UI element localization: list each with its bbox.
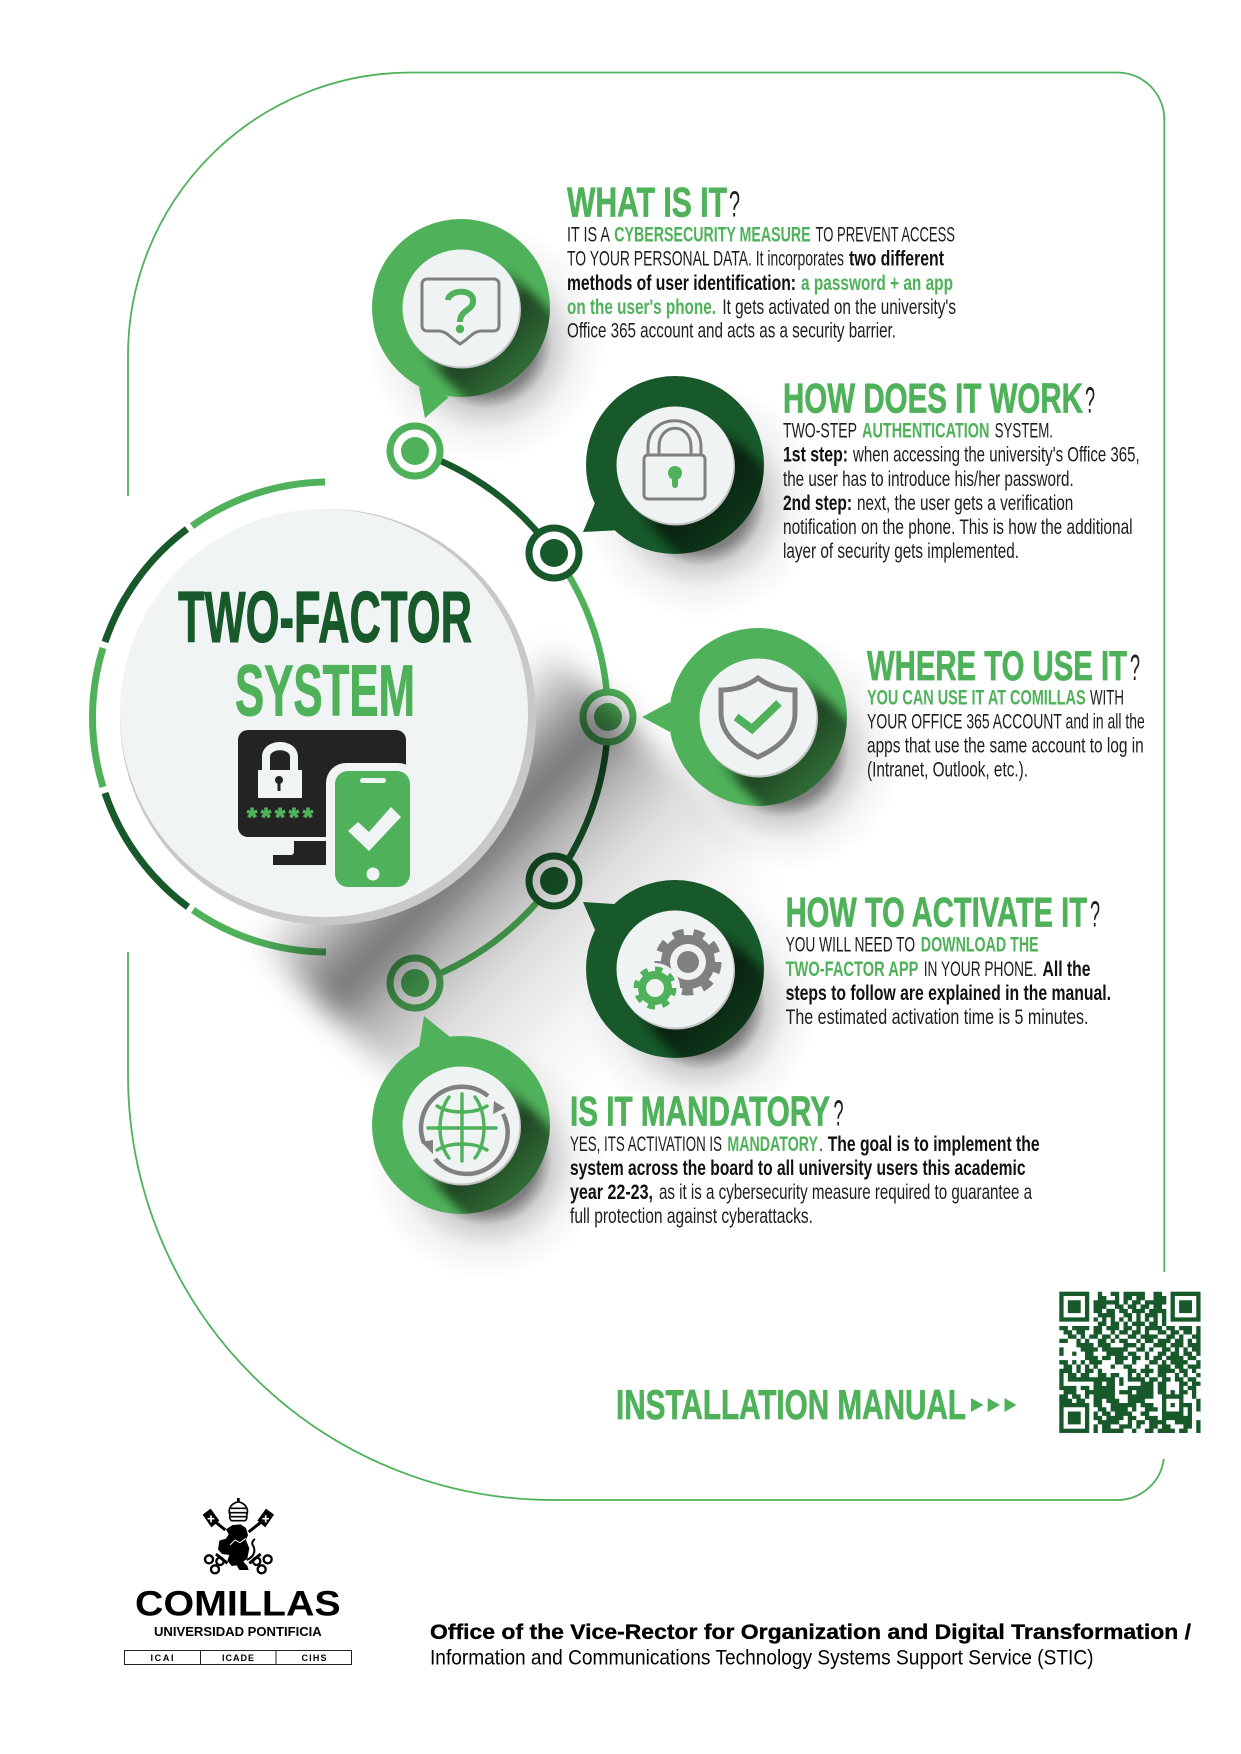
title: two-factor system: SYSTEM: [235, 652, 415, 732]
text block: where to use it: (Intranet, Outlook, etc.).: [867, 758, 1028, 782]
text block: what is it: TO YOUR PERSONAL DATA. It incorporates: [567, 247, 844, 271]
text block: where to use it: ?: [1130, 647, 1140, 688]
text block: where to use it: YOU CAN USE IT AT COMILLAS: [867, 685, 1086, 709]
text block: how does it work: TWO-STEP: [783, 418, 857, 442]
text block: what is it: ?: [729, 184, 740, 224]
bubble: how to activate it: [583, 880, 800, 1104]
text block: what is it: CYBERSECURITY MEASURE: [614, 222, 811, 246]
outer ring arcs: [92, 482, 326, 952]
page frame: [128, 72, 1164, 1500]
subtitle: UNIVERSIDAD PONTIFICIA: [154, 1624, 322, 1639]
title: two-factor system: [178, 578, 472, 732]
text block: how to activate it: TWO-FACTOR APP: [786, 957, 918, 981]
text block: how to activate it: DOWNLOAD THE: [921, 933, 1039, 957]
icon: question speech bubble: [422, 279, 499, 344]
bubble: what is it: [372, 219, 586, 443]
text block: is it mandatory: The goal is to implement the: [828, 1132, 1040, 1156]
footer credits: [430, 1621, 1191, 1670]
text block: how to activate it: [786, 889, 1111, 1029]
text block: is it mandatory: .: [819, 1132, 823, 1156]
icon: phone with check: [326, 763, 418, 893]
icon: crest: [203, 1498, 274, 1573]
node 5: [386, 954, 444, 1012]
text block: how does it work: layer of security gets implemented.: [783, 539, 1019, 563]
text block: is it mandatory: YES, ITS ACTIVATION IS: [570, 1132, 722, 1156]
bubble: where to use it: [642, 628, 883, 852]
footer credits: Office of the Vice-Rector for Organization and Digital Transformation /: [430, 1621, 1191, 1644]
bubble: is it mandatory: [372, 1016, 586, 1260]
icon: monitor with password: *****: [247, 802, 314, 832]
text block: how to activate it: All the: [1042, 957, 1091, 981]
text block: is it mandatory: year 22-23,: [570, 1180, 653, 1204]
icon: shield with check: [721, 678, 795, 757]
text block: how does it work: the user has to introduce his/her password.: [783, 467, 1074, 491]
text block: is it mandatory: ?: [834, 1093, 844, 1134]
installation manual link: INSTALLATION MANUAL: [616, 1381, 966, 1428]
node 2: [526, 524, 582, 582]
text block: what is it: two different: [849, 247, 944, 271]
icon: globe with arrows: [421, 1087, 508, 1174]
node 4: [526, 852, 582, 910]
connector arcs: [415, 451, 608, 983]
text block: what is it: on the user's phone.: [567, 295, 716, 319]
text block: where to use it: WITH: [1090, 685, 1124, 709]
QR code: [1059, 1294, 1201, 1431]
text block: is it mandatory: IS IT MANDATORY: [570, 1088, 830, 1135]
icon: monitor with password: [238, 730, 406, 865]
text block: is it mandatory: full protection against cyberattacks.: [570, 1204, 813, 1228]
schools table: ICADE: [222, 1653, 254, 1663]
text block: how does it work: SYSTEM.: [995, 418, 1053, 442]
footer credits: Information and Communications Technology Systems Support Service (STIC): [430, 1647, 1094, 1670]
text block: what is it: WHAT IS IT: [567, 178, 727, 226]
text block: how to activate it: YOU WILL NEED TO: [786, 933, 915, 957]
central disc cast shadow: [328, 717, 570, 959]
text block: how does it work: [783, 375, 1140, 563]
text block: how to activate it: IN YOUR PHONE.: [924, 957, 1037, 981]
text block: what is it: a password + an app: [801, 271, 953, 295]
node 1: [386, 422, 444, 480]
schools table: ICAI: [150, 1653, 174, 1663]
schools table: [124, 1650, 352, 1665]
text block: how to activate it: steps to follow are explained in the manual.: [786, 981, 1111, 1005]
text block: how does it work: next, the user gets a verification: [857, 491, 1073, 515]
text block: how does it work: 2nd step:: [783, 491, 852, 515]
connector timeline: [386, 422, 636, 1012]
schools table: CIHS: [302, 1653, 326, 1663]
text block: how to activate it: The estimated activation time is 5 minutes.: [786, 1005, 1088, 1029]
text block: how does it work: HOW DOES IT WORK: [783, 375, 1083, 422]
text block: is it mandatory: system across the board to all university users this academic: [570, 1156, 1026, 1180]
wordmark: COMILLAS: [135, 1585, 341, 1624]
logo: Comillas: [124, 1498, 352, 1665]
text block: how to activate it: ?: [1090, 894, 1100, 935]
text block: what is it: TO PREVENT ACCESS: [816, 222, 955, 246]
central disc: [120, 509, 536, 925]
text block: how does it work: 1st step:: [783, 443, 848, 467]
text block: how does it work: AUTHENTICATION: [862, 418, 990, 442]
text block: where to use it: [867, 642, 1145, 782]
text block: is it mandatory: as it is a cybersecurity measure required to guarantee a: [659, 1180, 1032, 1204]
text block: what is it: IT IS A: [567, 222, 610, 246]
text block: what is it: [567, 178, 956, 343]
title: two-factor system: TWO-FACTOR: [178, 578, 472, 658]
text block: how to activate it: HOW TO ACTIVATE IT: [786, 889, 1087, 936]
text block: is it mandatory: [570, 1088, 1040, 1228]
icon: gears: [630, 932, 718, 1013]
node 3: [580, 688, 636, 746]
icon: arrows: [971, 1398, 1016, 1412]
text block: what is it: Office 365 account and acts as a security barrier.: [567, 319, 896, 343]
text block: is it mandatory: MANDATORY: [727, 1132, 818, 1156]
text block: where to use it: WHERE TO USE IT: [867, 642, 1127, 689]
text block: what is it: It gets activated on the university's: [722, 295, 956, 319]
text block: how does it work: ?: [1085, 380, 1095, 421]
text block: what is it: methods of user identification:: [567, 271, 796, 295]
icon: padlock: [644, 421, 705, 499]
bubble: how does it work: [583, 376, 800, 600]
